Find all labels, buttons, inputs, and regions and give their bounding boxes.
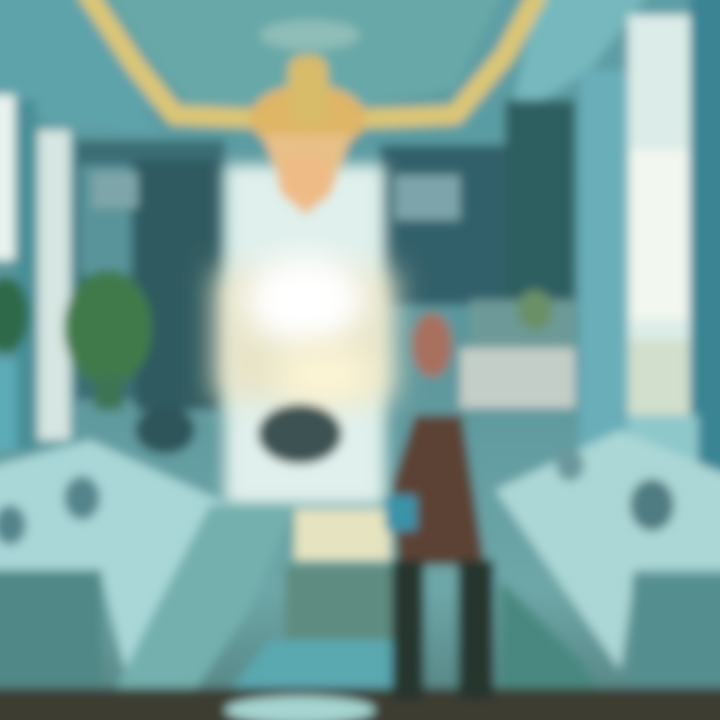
ceiling panel [0,0,660,145]
center rug and table [115,505,600,690]
standing figure [385,313,494,700]
floor [0,688,720,720]
figure apron [392,415,485,565]
center bright window [215,165,395,505]
right shelf with decor [460,290,575,408]
figure head [412,313,452,377]
dark center ornament [258,404,342,464]
left potted plants [0,270,195,454]
left wall and window [0,95,70,450]
left sofa [0,440,230,685]
gold chandelier [250,55,366,215]
back wall with dark curtains [75,100,575,410]
figure legs [392,560,494,700]
right sofa [495,430,720,685]
right wall columns and window [580,0,720,475]
teal bucket [385,495,417,531]
gold ceiling frame [85,0,540,120]
